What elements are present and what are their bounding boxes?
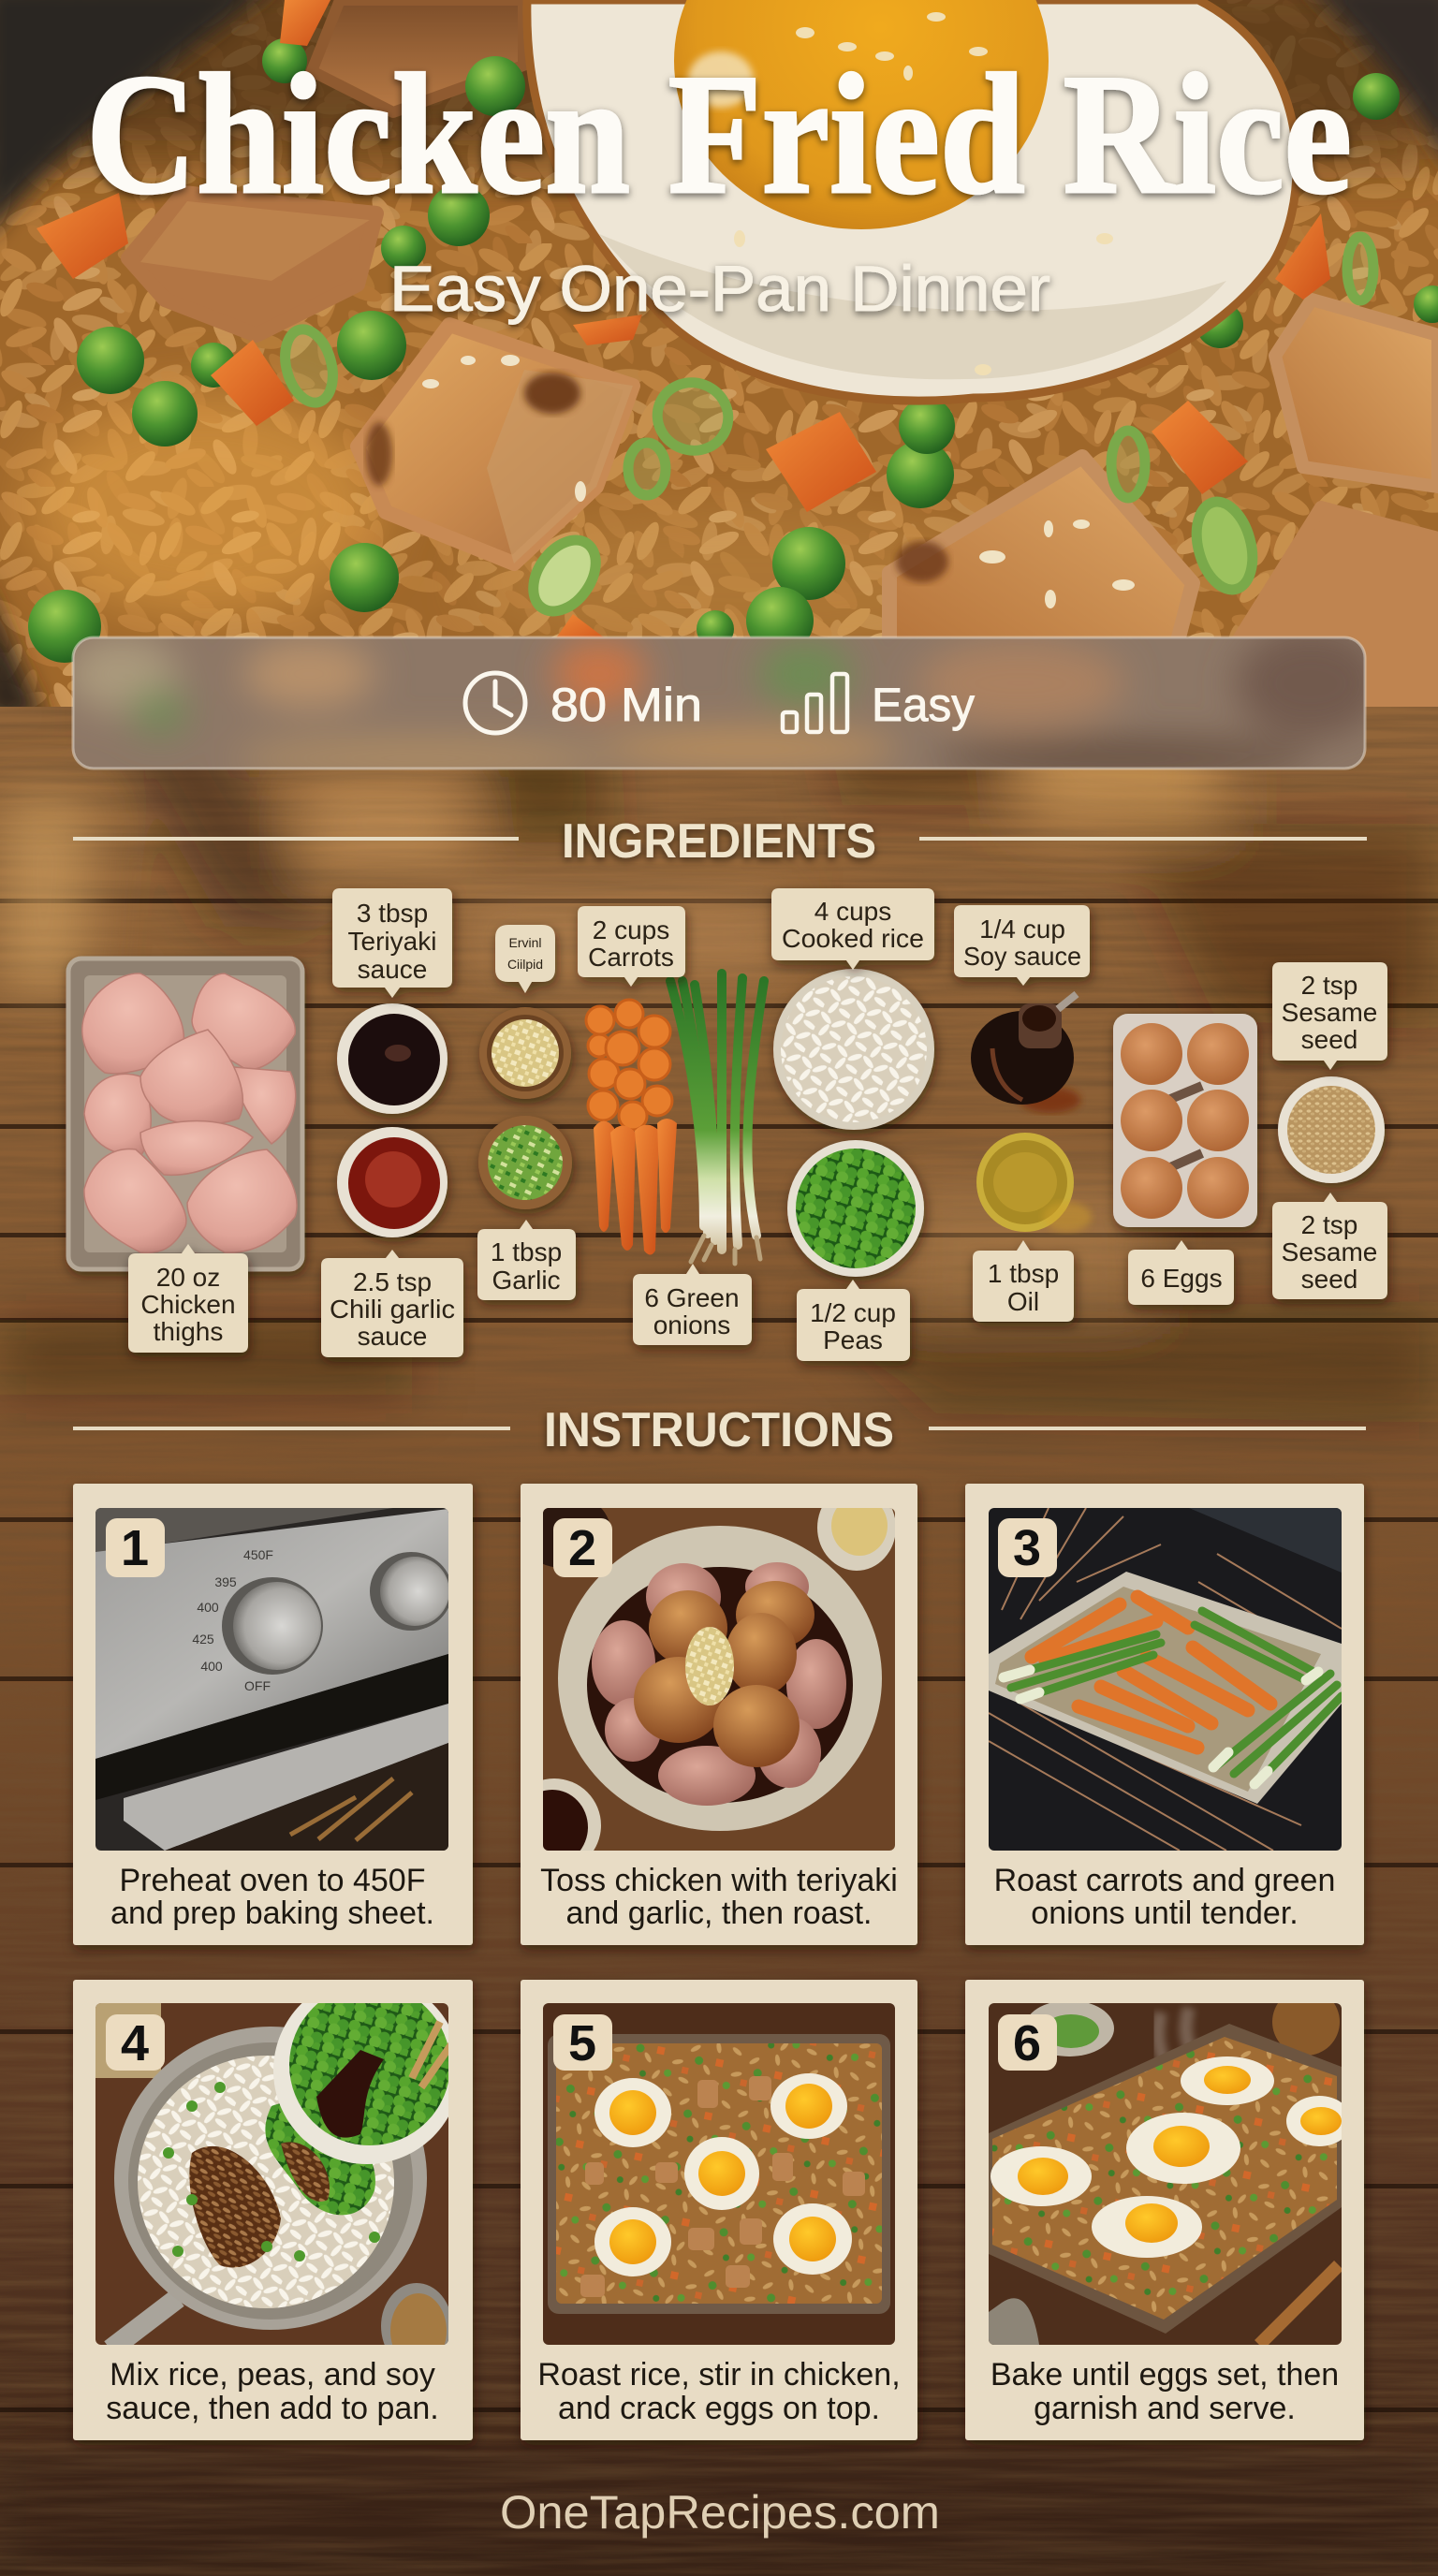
tag: green onions — [633, 1264, 752, 1345]
tag: garlic: 1 tbsp — [491, 1237, 562, 1266]
step 1 photo: oven: 425 — [192, 1632, 214, 1647]
ingredients heading — [73, 814, 1367, 869]
tag: carrots — [578, 906, 685, 987]
caption 1: Preheat oven to 450F — [119, 1863, 426, 1898]
ingredient: carrots — [586, 1000, 677, 1254]
tag: chili garlic: 2.5 tsp — [353, 1267, 432, 1296]
tag: rice — [771, 888, 934, 970]
tag: sesame bottom: 2 tsp — [1301, 1210, 1357, 1239]
caption 3: Roast carrots and green — [994, 1863, 1335, 1898]
caption 2: and garlic, then roast. — [566, 1895, 872, 1931]
tag: garbled small — [495, 925, 555, 993]
caption 2: Toss chicken with teriyaki — [540, 1863, 898, 1898]
badge 3 — [998, 1518, 1057, 1577]
tag: teriyaki: 3 tbsp — [357, 899, 428, 928]
tag: sesame top: 2 tsp — [1301, 971, 1357, 1000]
chicken chunk left — [128, 193, 376, 335]
ingredient: sesame bowl — [1278, 1076, 1385, 1183]
step card 2 — [507, 1484, 917, 1945]
tag: sesame bottom: seed — [1301, 1265, 1357, 1294]
tag: eggs — [1128, 1240, 1234, 1305]
tag: oil — [973, 1240, 1074, 1322]
step 5 photo: rice and eggs tray — [543, 2003, 895, 2345]
caption 3: onions until tender. — [1031, 1895, 1299, 1931]
peas — [28, 38, 1438, 663]
step card 6 — [965, 1980, 1364, 2440]
tag: sesame top: Sesame — [1282, 998, 1377, 1027]
caption 2 — [540, 1863, 898, 1931]
hero photo: fried rice with egg — [0, 0, 1438, 721]
icon: difficulty bars — [783, 674, 847, 732]
tag: sesame bottom: Sesame — [1282, 1237, 1377, 1266]
tag: chili garlic: sauce — [358, 1322, 427, 1351]
step 6 photo: baked tray — [989, 1988, 1352, 2345]
caption 6: Bake until eggs set, then — [990, 2357, 1339, 2393]
badge 4: 4 — [121, 2015, 149, 2071]
scallion rings — [277, 237, 1373, 622]
tag: sesame bottom — [1272, 1193, 1387, 1299]
ingredient: teriyaki bowl — [337, 1003, 448, 1114]
tag: carrots: 2 cups — [593, 915, 669, 944]
step 1 photo: oven: OFF — [244, 1678, 271, 1693]
badge 5: 5 — [568, 2015, 596, 2071]
chicken chunk center — [358, 325, 633, 564]
step 1 photo: oven: 400 — [197, 1600, 219, 1615]
caption 4 — [106, 2357, 439, 2426]
tag: green onions: onions — [653, 1310, 730, 1339]
badge 2: 2 — [568, 1520, 596, 1576]
tag: rice: 4 cups — [814, 897, 891, 926]
step card 4 — [73, 1977, 473, 2440]
tag: soy: Soy sauce — [963, 942, 1081, 971]
caption 1 — [110, 1863, 434, 1931]
tag: chicken: thighs — [154, 1317, 223, 1346]
step card 1 — [73, 1484, 473, 1945]
step 1 photo: oven: 400 — [200, 1659, 223, 1674]
caption 4: Mix rice, peas, and soy — [110, 2357, 435, 2393]
tag: garbled small: Ciilpid — [507, 957, 543, 972]
chicken chunk bottom right — [1239, 507, 1438, 707]
chicken chunk right — [1275, 300, 1438, 487]
fried egg — [527, 0, 1297, 401]
tag: garlic — [477, 1220, 576, 1300]
badge 6 — [998, 2014, 1057, 2071]
tag: sesame top — [1272, 962, 1387, 1070]
step 1 photo: oven: 450F — [243, 1547, 273, 1562]
tag: chicken — [128, 1244, 248, 1353]
tag: peas: Peas — [823, 1325, 883, 1354]
ingredient: oil bowl — [976, 1133, 1092, 1232]
footer site name: OneTapRecipes.com — [500, 2486, 940, 2539]
step card 5 — [521, 1980, 917, 2440]
difficulty: Easy — [872, 679, 975, 731]
tag: eggs: 6 Eggs — [1140, 1264, 1223, 1293]
caption 1: and prep baking sheet. — [110, 1895, 434, 1931]
tag: teriyaki: sauce — [358, 955, 427, 984]
tag: carrots: Carrots — [588, 943, 674, 972]
caption 3 — [994, 1863, 1335, 1931]
ingredient: peas bowl — [787, 1140, 924, 1277]
caption 5: Roast rice, stir in chicken, — [537, 2357, 901, 2393]
ingredient: green onions — [670, 973, 764, 1264]
carrots — [37, 0, 1330, 646]
caption 5: and crack eggs on top. — [558, 2391, 880, 2426]
badge 3: 3 — [1013, 1520, 1041, 1576]
tag: green onions: 6 Green — [644, 1283, 740, 1312]
badge 6: 6 — [1013, 2015, 1041, 2071]
subtitle: Easy One-Pan Dinner — [389, 253, 1050, 325]
tag: garlic: Garlic — [492, 1266, 561, 1295]
caption 4: sauce, then add to pan. — [106, 2391, 439, 2426]
tag: chicken: Chicken — [140, 1290, 236, 1319]
tag: soy — [954, 905, 1090, 986]
tag: chili garlic — [321, 1250, 463, 1357]
chicken chunk top — [312, 0, 523, 112]
ingredients heading: INGREDIENTS — [562, 814, 876, 869]
step 1 photo: oven — [95, 1508, 452, 1851]
tag: peas — [797, 1280, 910, 1361]
chicken chunk lower right — [889, 457, 1193, 655]
ingredient: cooked rice bowl — [773, 969, 934, 1130]
tag: chicken: 20 oz — [156, 1263, 220, 1292]
step 1 photo: oven: 395 — [214, 1574, 237, 1589]
badge 1: 1 — [121, 1520, 149, 1576]
frosted stats bar — [66, 627, 1386, 779]
caption 6: garnish and serve. — [1034, 2391, 1296, 2426]
step card 3 — [965, 1484, 1364, 1945]
cook time: 80 Min — [550, 679, 702, 731]
instructions heading: INSTRUCTIONS — [544, 1403, 894, 1457]
tag: garbled small: Ervinl — [508, 935, 542, 950]
ingredient: chopped scallions bowl — [478, 1116, 572, 1209]
tag: oil: 1 tbsp — [988, 1259, 1059, 1288]
caption 6 — [990, 2357, 1339, 2426]
ingredient: chicken thighs tray — [68, 959, 302, 1269]
ingredient: garlic bowl — [479, 1007, 571, 1099]
tag: peas: 1/2 cup — [810, 1298, 896, 1327]
badge 2 — [553, 1518, 612, 1577]
ingredient: eggs in carton — [1113, 1014, 1257, 1227]
tag: oil: Oil — [1007, 1287, 1039, 1316]
tag: teriyaki: Teriyaki — [348, 927, 436, 956]
tag: rice: Cooked rice — [782, 924, 924, 953]
ingredient: soy sauce — [971, 994, 1080, 1113]
caption 5 — [537, 2357, 901, 2426]
tag: soy: 1/4 cup — [979, 915, 1065, 944]
step 3 photo: roasting vegetables — [989, 1508, 1342, 1851]
tag: chili garlic: Chili garlic — [330, 1295, 455, 1324]
badge 1 — [106, 1518, 165, 1577]
badge 5 — [553, 2014, 612, 2071]
tag: teriyaki — [332, 888, 452, 998]
step 4 photo: mix in pan — [95, 1977, 461, 2369]
badge 4 — [106, 2014, 165, 2071]
ingredient: chili garlic bowl — [337, 1127, 448, 1237]
instructions heading — [73, 1403, 1366, 1457]
icon: clock — [465, 673, 525, 733]
step 2 photo: chicken bowl — [507, 1485, 896, 1872]
labels: ingredient tags — [128, 888, 1387, 1361]
tag: sesame top: seed — [1301, 1025, 1357, 1054]
